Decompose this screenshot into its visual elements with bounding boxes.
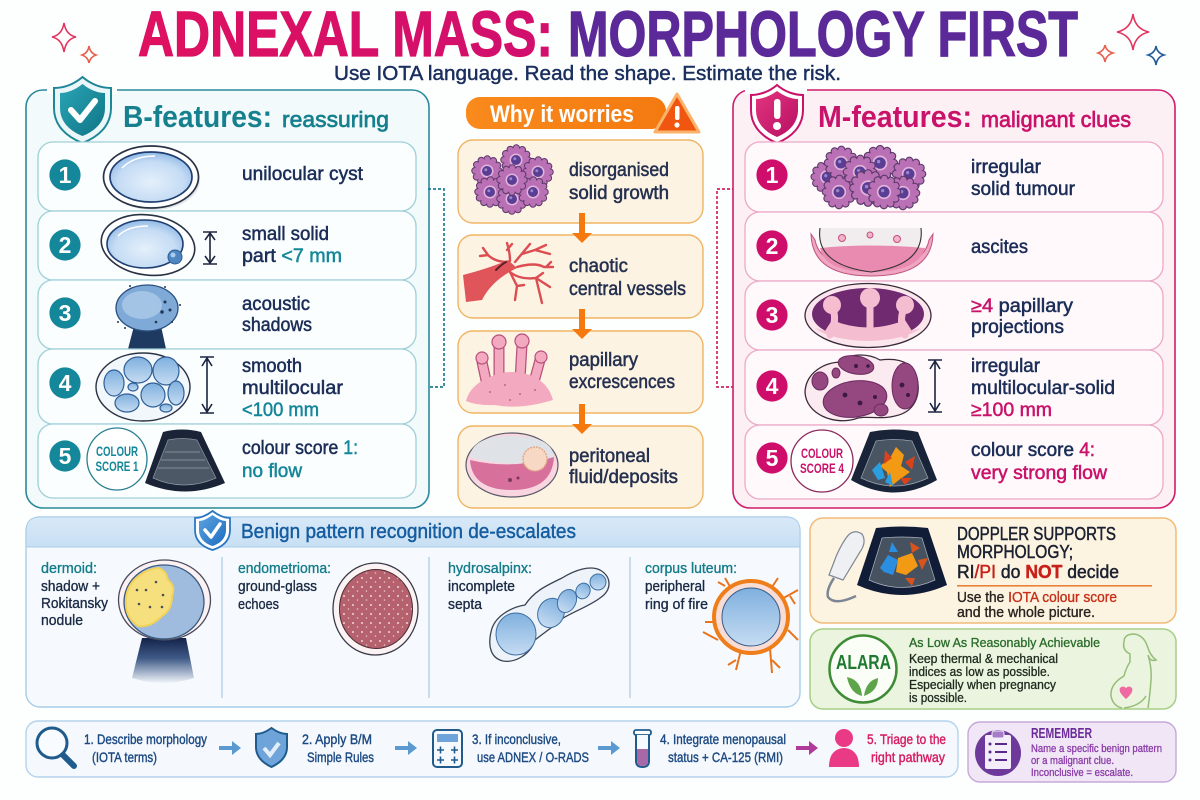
step 2: apply simple rules bbox=[256, 728, 374, 767]
heading: M-features: malignant clues bbox=[981, 107, 1131, 132]
divider bbox=[222, 557, 630, 698]
icon: papillary projections bbox=[805, 284, 931, 348]
connector: B-features dotted bracket bbox=[428, 189, 444, 387]
icon: multilocular-solid mass bbox=[805, 353, 918, 421]
row: smooth multilocular: multilocular bbox=[242, 378, 344, 399]
row: irregular solid tumour: solid tumour bbox=[971, 179, 1076, 200]
step 2: apply simple rules: Simple Rules bbox=[307, 749, 374, 765]
icon: irregular tumour bbox=[814, 149, 922, 206]
icon: magnifier bbox=[37, 728, 74, 766]
text: doppler heading: DOPPLER SUPPORTS bbox=[957, 523, 1116, 544]
icon: ALARA badge bbox=[830, 636, 896, 702]
column: corpus luteum: corpus luteum: bbox=[645, 560, 737, 577]
row: unilocular cyst: unilocular cyst bbox=[242, 164, 364, 185]
arrow: step 3 to 4 bbox=[598, 741, 620, 755]
badge: colour score 1 bbox=[87, 428, 147, 490]
badge: colour score 4 bbox=[791, 430, 853, 492]
panel: why it worries bbox=[458, 94, 703, 508]
row: irregular multilocular-solid: 4 bbox=[766, 373, 779, 399]
row: colour score 1: 5 bbox=[59, 443, 72, 469]
text: ALARA: indices as low as possible. bbox=[909, 665, 1050, 679]
row: acoustic shadows: acoustic bbox=[242, 294, 310, 315]
panel: workflow bbox=[26, 721, 958, 777]
box: disorganised solid growth: disorganised bbox=[569, 160, 669, 181]
text: ALARA bbox=[909, 635, 1100, 705]
row: irregular solid tumour bbox=[745, 142, 1163, 212]
column: hydrosalpinx: septa bbox=[448, 596, 483, 613]
column: endometrioma bbox=[238, 560, 418, 655]
step 2: apply simple rules: 2. Apply B/M bbox=[302, 731, 372, 747]
text: doppler heading: MORPHOLOGY; bbox=[957, 541, 1073, 562]
icon: ultrasound probe bbox=[828, 532, 864, 601]
box: peritoneal fluid/deposits: peritoneal bbox=[569, 446, 650, 467]
box: papillary excrescences bbox=[458, 331, 703, 413]
icon: calculator bbox=[433, 730, 462, 767]
icon: pink shield with exclamation bbox=[751, 85, 803, 143]
text: doppler heading: RI/PI do NOT decide bbox=[957, 561, 1119, 582]
heading: M-features: M-features: bbox=[818, 99, 972, 134]
row: irregular solid tumour: 1 bbox=[766, 162, 779, 188]
row: small solid part: part <7 mm bbox=[242, 246, 342, 267]
row: colour score 4: very strong flow bbox=[971, 463, 1107, 484]
column: dermoid: dermoid: bbox=[41, 560, 97, 577]
step 3: adnex o-rads bbox=[433, 730, 589, 767]
icon: shield bbox=[256, 728, 287, 767]
icon: cell cluster bbox=[475, 148, 550, 211]
text: remember heading: REMEMBER bbox=[1031, 726, 1092, 742]
icon: peritoneal bowl bbox=[466, 433, 558, 497]
icon: person bbox=[829, 729, 859, 767]
subtitle: Use IOTA language. Read the shape. Estimate the risk. bbox=[334, 63, 841, 85]
icon: unilocular cyst bbox=[104, 146, 200, 210]
header band bbox=[26, 517, 800, 547]
heading: M-features bbox=[818, 99, 1131, 134]
icon: papillary excrescences bbox=[466, 334, 553, 407]
row: irregular multilocular-solid: multilocular-solid bbox=[971, 378, 1115, 399]
row: irregular multilocular-solid: ≥100 mm bbox=[971, 400, 1052, 421]
row: colour score 4 bbox=[745, 425, 1163, 499]
row: smooth multilocular: smooth bbox=[242, 356, 302, 377]
row: ascites: ascites bbox=[971, 237, 1028, 258]
column: dermoid: shadow + bbox=[41, 578, 100, 595]
step 1: describe morphology bbox=[37, 728, 207, 766]
arrow: down 3 bbox=[572, 404, 592, 434]
step 5: triage bbox=[829, 729, 946, 767]
box: chaotic central vessels: central vessels bbox=[569, 279, 686, 300]
column: endometrioma: ground-glass bbox=[238, 578, 317, 595]
column: corpus luteum bbox=[645, 560, 798, 673]
icon: right sparkles bbox=[1098, 14, 1164, 65]
row: unilocular cyst bbox=[38, 142, 416, 211]
badge: colour score 4: SCORE 4 bbox=[800, 460, 844, 476]
row: colour score 1 bbox=[38, 424, 416, 498]
panel: benign pattern recognition bbox=[26, 511, 800, 707]
text: ALARA: Keep thermal & mechanical bbox=[909, 652, 1058, 666]
step 4: integrate status bbox=[634, 730, 786, 767]
step 4: integrate status: 4. Integrate menopausal bbox=[660, 731, 786, 747]
icon: chaotic vessels bbox=[463, 243, 553, 303]
icon: blue shield bbox=[195, 511, 230, 550]
heading: benign pattern: Benign pattern recognition de-escalates bbox=[241, 520, 576, 543]
icon: dermoid cyst bbox=[118, 560, 210, 683]
heading: B-features bbox=[123, 99, 389, 134]
text: doppler note: Use the IOTA colour score bbox=[957, 590, 1117, 606]
row: papillary projections: ≥4 papillary bbox=[971, 296, 1074, 317]
row: unilocular cyst: 1 bbox=[59, 162, 72, 188]
column: hydrosalpinx: incomplete bbox=[448, 578, 515, 595]
icon: teal shield with check bbox=[54, 77, 111, 143]
row: ascites bbox=[745, 212, 1163, 281]
column: dermoid bbox=[41, 560, 210, 683]
panel: M-features bbox=[733, 85, 1175, 508]
heading: B-features: B-features: bbox=[123, 99, 272, 134]
row: irregular multilocular-solid: irregular bbox=[971, 356, 1041, 377]
step 3: adnex o-rads: use ADNEX / O-RADS bbox=[477, 749, 589, 765]
column: corpus luteum: ring of fire bbox=[645, 596, 708, 613]
step 3: adnex o-rads: 3. If inconclusive, bbox=[472, 731, 561, 747]
icon: hydrosalpinx bbox=[490, 568, 609, 661]
text: remember body: Name a specific benign pattern bbox=[1031, 743, 1162, 755]
column: hydrosalpinx bbox=[448, 560, 609, 661]
icon: cyst with solid part bbox=[97, 209, 199, 281]
box: chaotic central vessels bbox=[458, 235, 703, 318]
icon: doppler sector bbox=[857, 526, 947, 595]
divider line bbox=[957, 585, 1152, 587]
row: acoustic shadows: 3 bbox=[59, 300, 71, 326]
icon: left sparkles bbox=[52, 23, 96, 63]
box: papillary excrescences: excrescences bbox=[569, 372, 675, 393]
icon: ALARA badge: ALARA bbox=[836, 652, 891, 674]
row: colour score 4: colour score 4: bbox=[971, 440, 1095, 461]
icon: caliper bbox=[200, 357, 214, 413]
column: hydrosalpinx: hydrosalpinx: bbox=[448, 560, 532, 577]
row: papillary projections: projections bbox=[971, 317, 1064, 338]
row: smooth multilocular: 4 bbox=[59, 370, 72, 396]
box: disorganised solid growth: solid growth bbox=[569, 183, 669, 204]
panel: B-features bbox=[26, 77, 429, 508]
row: acoustic shadows: shadows bbox=[242, 315, 312, 336]
row: smooth multilocular: <100 mm bbox=[242, 400, 319, 421]
panel: ALARA bbox=[810, 629, 1176, 709]
column: endometrioma: echoes bbox=[238, 596, 279, 613]
row: small solid part: 2 bbox=[59, 232, 71, 258]
box: disorganised solid growth bbox=[458, 140, 703, 223]
row: ascites: 2 bbox=[766, 233, 778, 259]
arrow: down 2 bbox=[572, 309, 592, 339]
icon: endometrioma bbox=[333, 563, 418, 655]
icon: ascites bbox=[811, 228, 933, 276]
icon: clipboard bbox=[975, 730, 1021, 776]
badge: colour score 1: SCORE 1 bbox=[96, 458, 139, 474]
box: peritoneal fluid/deposits bbox=[458, 426, 703, 508]
step 5: triage: right pathway bbox=[871, 749, 945, 765]
text: doppler note: and the whole picture. bbox=[957, 605, 1095, 621]
text: remember body: Inconclusive = escalate. bbox=[1031, 767, 1133, 779]
icon: caliper bbox=[203, 232, 217, 264]
icon: acoustic shadow bbox=[116, 285, 181, 349]
icon: multilocular cyst bbox=[96, 353, 190, 421]
icon: pregnant silhouette bbox=[1111, 634, 1156, 708]
row: acoustic shadows bbox=[38, 280, 416, 349]
text: doppler note bbox=[957, 590, 1117, 621]
column: corpus luteum: peripheral bbox=[645, 578, 705, 595]
step 4: integrate status: status + CA-125 (RMI) bbox=[668, 749, 783, 765]
text: ALARA: Especially when pregnancy bbox=[909, 678, 1057, 692]
row: smooth multilocular bbox=[38, 349, 416, 424]
column: dermoid: nodule bbox=[41, 612, 83, 629]
icon: ultrasound sector no flow bbox=[145, 430, 225, 492]
text: ALARA: As Low As Reasonably Achievable bbox=[909, 635, 1100, 650]
row: colour score 4: 5 bbox=[766, 445, 779, 471]
title: ADNEXAL MASS: bbox=[138, 0, 553, 70]
panel: remember bbox=[968, 722, 1176, 782]
column: endometrioma: endometrioma: bbox=[238, 560, 331, 577]
arrow: down 1 bbox=[572, 213, 592, 243]
row: colour score 1: no flow bbox=[242, 461, 302, 482]
row: irregular multilocular-solid bbox=[745, 350, 1163, 425]
icon: caliper bbox=[928, 360, 942, 412]
text: ALARA: is possible. bbox=[909, 691, 967, 705]
step 1: describe morphology: (IOTA terms) bbox=[92, 749, 157, 765]
text: remember body bbox=[1031, 743, 1162, 779]
badge: colour score 1: COLOUR bbox=[96, 443, 138, 459]
row: irregular solid tumour: irregular bbox=[971, 157, 1042, 178]
box: peritoneal fluid/deposits: fluid/deposits bbox=[569, 467, 678, 488]
step 5: triage: 5. Triage to the bbox=[867, 731, 946, 747]
arrow: step 1 to 2 bbox=[219, 741, 241, 755]
icon: ultrasound sector strong flow bbox=[851, 430, 937, 492]
badge: colour score 4: COLOUR bbox=[801, 445, 843, 461]
icon: corpus luteum ring of fire bbox=[703, 578, 798, 673]
row: small solid part: small solid bbox=[242, 224, 329, 245]
row: small solid part bbox=[38, 209, 416, 281]
panel: doppler bbox=[810, 518, 1176, 623]
row: colour score 1: colour score 1: bbox=[242, 438, 358, 459]
arrow: step 2 to 3 bbox=[395, 741, 417, 755]
box: chaotic central vessels: chaotic bbox=[569, 256, 628, 277]
heading pill bbox=[466, 97, 666, 129]
row: papillary projections: 3 bbox=[766, 302, 778, 328]
title bbox=[138, 0, 1078, 70]
text: remember body: or a malignant clue. bbox=[1031, 755, 1114, 767]
text: doppler heading bbox=[957, 523, 1119, 582]
heading: B-features: reassuring bbox=[282, 107, 389, 132]
column: dermoid: Rokitansky bbox=[41, 595, 108, 612]
row: papillary projections bbox=[745, 281, 1163, 350]
icon: test tube bbox=[634, 730, 651, 767]
connector: M-features dotted bracket bbox=[717, 189, 735, 387]
arrow: step 4 to 5 bbox=[796, 741, 818, 755]
icon: warning triangle bbox=[655, 94, 699, 132]
box: papillary excrescences: papillary bbox=[569, 350, 638, 371]
heading pill: Why it worries bbox=[490, 101, 634, 128]
step 1: describe morphology: 1. Describe morphology bbox=[84, 731, 207, 747]
